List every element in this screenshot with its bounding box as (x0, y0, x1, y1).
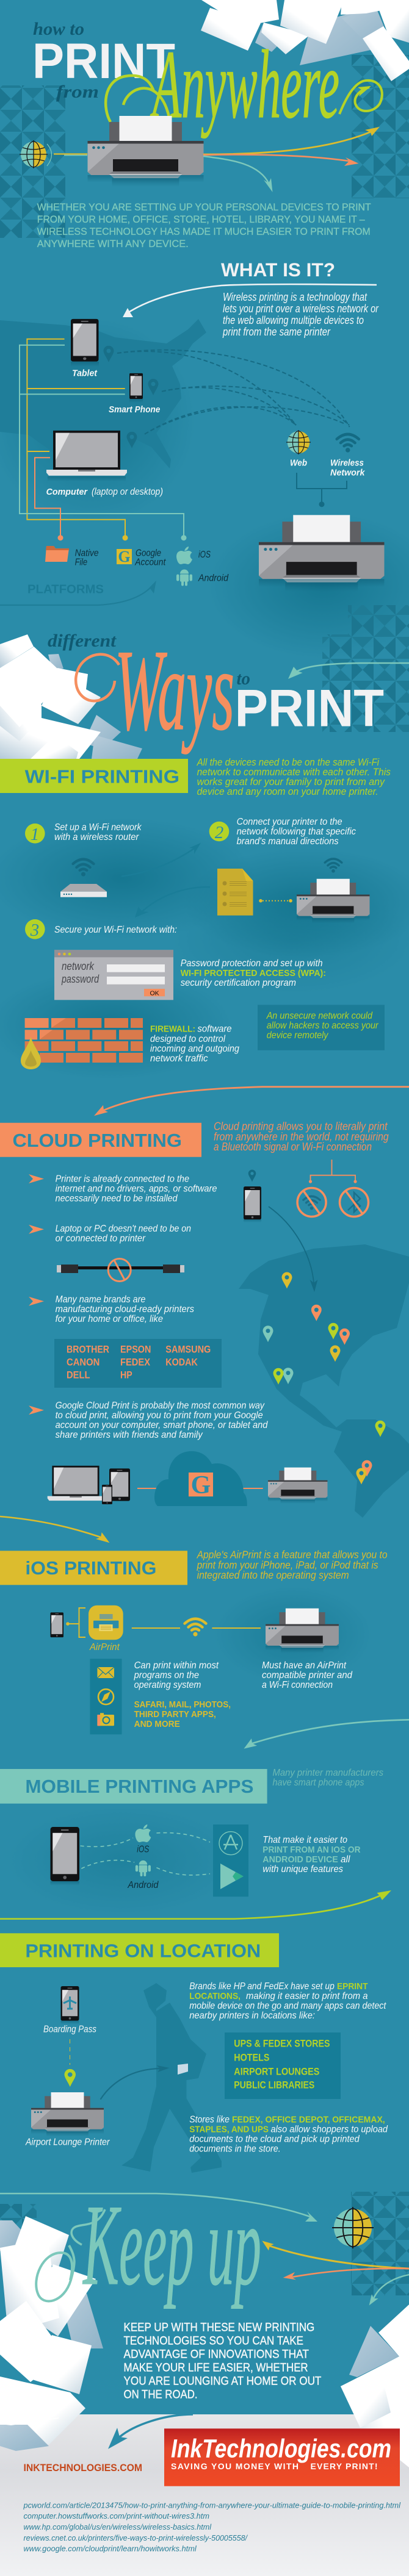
intro paragraph: ANYWHERE WITH ANY DEVICE. (37, 238, 189, 249)
arrow: orange (283, 2269, 409, 2280)
text: keep up paragraph: YOU ARE LOUNGING AT HOME OR OUT (123, 2375, 322, 2388)
text: compatibility: compatible printer and (262, 1670, 353, 1681)
icon: cloud with Google (154, 1451, 247, 1506)
paper pile: bottom right (341, 2305, 409, 2467)
description: have smart phone apps (272, 1778, 364, 1788)
intro paragraph: WHETHER YOU ARE SETTING UP YOUR PERSONAL DEVICES TO PRINT (37, 201, 371, 213)
band (0, 1769, 267, 1804)
heading: CLOUD PRINTING (12, 1130, 182, 1151)
text: apps: PRINT FROM AN IOS OR (262, 1845, 361, 1855)
heading: PRINT: PRINT (235, 680, 384, 738)
text: firewall: FIREWALL: (150, 1024, 195, 1035)
connectors: platforms (20, 339, 187, 540)
arrow: teal (288, 663, 409, 679)
platform: android: Android (127, 1880, 159, 1890)
panel: printer brands: EPSON (120, 1344, 151, 1355)
icon: app store (219, 1832, 242, 1855)
icon: wireless (337, 434, 359, 453)
icon: firewall (21, 1018, 143, 1069)
label: airport lounge printer: Airport Lounge Printer (25, 2137, 110, 2148)
arrow: step 1 to 2 (121, 843, 201, 877)
footer background (0, 2414, 409, 2576)
icon: printer (259, 515, 385, 592)
arrow: lime (0, 1890, 391, 1919)
text: firewall (150, 1024, 239, 1064)
icon: mail (97, 1667, 114, 1678)
text: definition: print from the same printer (222, 326, 331, 338)
description: works great for your family to print from any (197, 777, 386, 788)
arrow: white (123, 284, 377, 317)
description (197, 1548, 388, 1581)
login dialog: password (61, 973, 100, 985)
text: definition: Wireless printing is a technology that (223, 291, 367, 303)
sources: reviews.cnet.co.uk/printers/five-ways-to-print-wirelessly-50005558/ (23, 2533, 248, 2542)
platform: iOS: iOS (198, 550, 211, 560)
step 2: Connect your printer to the (237, 817, 342, 827)
icon: globe (20, 140, 87, 168)
connector (309, 1160, 357, 1183)
panel: printer brands: HP (120, 1369, 132, 1381)
panel: app stores (213, 1824, 248, 1896)
step 1 (25, 822, 142, 844)
text: eprint: Brands like HP and FedEx have set up (189, 1981, 335, 1992)
text: Ways (115, 626, 234, 755)
callout: unsecure network (258, 1005, 385, 1050)
dashed links (81, 1833, 210, 1875)
text: keep up paragraph (123, 2321, 322, 2401)
heading: MOBILE PRINTING APPS (25, 1776, 253, 1797)
bullet 3: Many name brands are (56, 1294, 145, 1305)
bullet 1: necessarily need to be installed (56, 1194, 178, 1204)
callout: unsecure network: An unsecure network could (266, 1011, 373, 1021)
label: platforms: PLATFORMS (27, 583, 104, 597)
arrow: to paper (100, 2065, 170, 2100)
heading: WI-FI PRINTING (25, 766, 179, 787)
text: eprint: LOCATIONS, (189, 1991, 241, 2001)
icon: cloud with Google: G (191, 1471, 211, 1499)
link lines (137, 1488, 263, 1489)
icon: printer (266, 1609, 339, 1653)
bullet 3: manufacturing cloud-ready printers (56, 1304, 194, 1315)
icon: tablet (71, 319, 99, 367)
sources: computer.howstuffworks.com/print-without-wires3.htm (23, 2511, 209, 2520)
panel: mobile printing apps (0, 1768, 383, 1804)
dotted link (259, 899, 292, 902)
text: keep up paragraph: ON THE ROAD. (123, 2388, 198, 2401)
heading: to: to (237, 669, 250, 689)
label: smart phone: Smart Phone (109, 404, 160, 415)
bullet 4 (29, 1401, 268, 1440)
panel: printer brands (54, 1339, 222, 1388)
text: definition: the web allowing multiple devices to (223, 314, 364, 326)
platform: google account: Google (136, 548, 161, 559)
description (214, 1120, 389, 1153)
icon: no wifi (297, 1188, 326, 1216)
step 2: brand's manual directions (237, 836, 339, 847)
description: from anywhere in the world, not requiring (214, 1130, 389, 1143)
label: wireless network: Wireless (330, 457, 364, 468)
text: WPA: security certification program (181, 978, 296, 988)
platform: iOS (135, 1824, 151, 1855)
platform: android (127, 1860, 159, 1890)
arrow: platforms (0, 581, 156, 605)
link lines (132, 1627, 261, 1629)
sources: www.hp.com/global/us/en/wireless/wireless-basics.html (23, 2522, 212, 2531)
text: keep up paragraph: ADVANTAGE OF INNOVATIONS THAT (123, 2348, 309, 2361)
icon: devices (48, 1466, 130, 1504)
bullet 3 (29, 1294, 194, 1324)
text: apps: with unique features (262, 1864, 343, 1875)
text: apps: That make it easier to (262, 1835, 347, 1845)
description: Apple's AirPrint is a feature that allows you to (197, 1548, 388, 1560)
platform: native file: File (75, 557, 87, 567)
label: computer (46, 487, 163, 497)
icon: laptop (46, 431, 127, 481)
text: eprint (189, 1981, 386, 2021)
panel: printing on location (0, 1933, 279, 1967)
arrow: teal (203, 156, 272, 192)
paper pile: top right (201, 0, 409, 81)
label: computer: Computer (46, 487, 88, 497)
description: print from your iPhone, iPad, or iPod that is (197, 1559, 378, 1571)
sources: pcworld.com/article/2013475/how-to-print-anything-from-anywhere-your-ultimate-guide-to-mobile-printing.html (23, 2500, 401, 2510)
icon: printer hero (88, 116, 204, 187)
platform: android (176, 570, 229, 586)
dashed connection curves (117, 350, 350, 434)
step 2: 2 (215, 823, 223, 842)
step 1: with a wireless router (54, 832, 139, 842)
icon: wifi over router (73, 859, 93, 877)
band (0, 1551, 187, 1585)
icon: globe (332, 2207, 374, 2248)
text: apps: ANDROID DEVICE (262, 1854, 338, 1865)
icon: AirPrint tile (89, 1606, 123, 1640)
text: compatibility (262, 1660, 353, 1690)
text: programs: operating system (134, 1680, 201, 1690)
icon: wifi (184, 1619, 206, 1637)
description (272, 1768, 383, 1788)
text: eprint: mobile device on the go and many apps can detect (189, 2001, 386, 2011)
panel: printer brands: BROTHER (67, 1344, 109, 1355)
heading: PRINTING ON LOCATION (25, 1940, 261, 1961)
arrow: teal (369, 2275, 409, 2305)
text: stores: STAPLES, AND UPS (189, 2124, 269, 2134)
description: integrated into the operating system (197, 1569, 349, 1581)
bullet 4: share printers with friends and family (56, 1430, 203, 1440)
text: firewall: network traffic (150, 1053, 208, 1064)
bullet 1: Printer is already connected to the (56, 1174, 189, 1185)
text: apps: all (341, 1854, 350, 1865)
description: All the devices need to be on the same Wi-Fi (197, 757, 380, 768)
sources (23, 2500, 401, 2553)
icon: phone with boarding pass (61, 1986, 79, 2025)
label: AirPrint: AirPrint (89, 1642, 120, 1652)
login dialog: network (62, 960, 95, 972)
silhouette: walking traveller (121, 1983, 222, 2173)
text: firewall: incoming and outgoing (150, 1044, 239, 1054)
login dialog (54, 950, 173, 1000)
panel: locations: PUBLIC LIBRARIES (234, 2079, 314, 2090)
bullet 4: account on your computer, smart phone, or tablet and (56, 1420, 268, 1430)
location pins (104, 346, 159, 448)
panel: printer brands: CANON (67, 1357, 100, 1368)
icon: pin (65, 2069, 76, 2087)
heading: what is it: WHAT IS IT? (221, 259, 335, 281)
bullet 1 (29, 1174, 217, 1204)
step 3 (25, 919, 177, 940)
description: Many printer manufacturers (272, 1768, 383, 1778)
heading: from: from (56, 82, 99, 102)
platform: iOS: iOS (137, 1845, 150, 1855)
panel: locations (225, 2032, 341, 2099)
bullet 4: to cloud print, allowing you to print from your Google (56, 1410, 263, 1421)
panel: locations: HOTELS (234, 2051, 269, 2063)
bullet 1: internet and no drivers, apps, or software (56, 1184, 217, 1194)
label: web: Web (290, 457, 307, 468)
callout: unsecure network: allow hackers to access your (267, 1021, 378, 1031)
step 3: Secure your Wi-Fi network with: (54, 925, 177, 935)
text: stores: Stores like (189, 2114, 230, 2125)
icon: small wifi (325, 859, 342, 873)
text: eprint: EPRINT (337, 1981, 367, 1992)
link: website: INKTECHNOLOGIES.COM (23, 2463, 142, 2474)
heading: Keep up script (36, 2181, 261, 2309)
intro paragraph (37, 201, 371, 249)
panel: locations: AIRPORT LOUNGES (234, 2066, 319, 2078)
text: WPA: Password protection and set up with (181, 958, 323, 969)
text: compatibility: a Wi-Fi connection (262, 1680, 333, 1690)
logo (164, 2428, 400, 2486)
heading: different: different (48, 631, 117, 651)
sources: www.google.com/cloudprint/learn/howitworks.html (23, 2544, 197, 2553)
text: WPA: WI-FI PROTECTED ACCESS (WPA): (181, 968, 326, 978)
panel: printer brands: KODAK (165, 1357, 198, 1368)
arrow: yellow (203, 127, 380, 154)
label: computer: (laptop or desktop) (92, 487, 163, 497)
icon: printer (31, 2092, 104, 2137)
description (197, 757, 391, 797)
text: eprint: nearby printers in locations like: (189, 2011, 315, 2021)
heading: PRINT: PRINT (32, 34, 175, 89)
icon: no bluetooth (339, 1188, 369, 1216)
icon: pin (248, 1170, 256, 1182)
label: tablet: Tablet (72, 368, 98, 379)
icon: phone (244, 1186, 261, 1222)
band (0, 1123, 201, 1157)
icon: printer (297, 879, 370, 924)
bullet 2: Laptop or PC doesn't need to be on (56, 1224, 191, 1234)
text: firewall: software (198, 1024, 232, 1035)
arc arrow (269, 1207, 317, 1292)
icon: phone (50, 1612, 63, 1637)
arrow: teal (244, 1720, 409, 1749)
icon: printer (268, 1468, 327, 1504)
text: apps (262, 1835, 361, 1875)
heading: how to: how to (33, 19, 84, 39)
label: boarding pass: Boarding Pass (43, 2025, 96, 2035)
panel: wi-fi printing (0, 757, 391, 797)
description: device and any room on your home printer. (197, 786, 378, 797)
logo: SAVING YOU MONEY WITH (171, 2461, 299, 2471)
arrow: step 2 to 3 (135, 887, 210, 917)
text: stores: also allow shoppers to upload (271, 2124, 388, 2134)
icon: compass (98, 1689, 114, 1704)
description: a Bluetooth signal or Wi-Fi connection (214, 1141, 372, 1153)
description: network to communicate with each other. This (197, 767, 391, 778)
step 3: 3 (30, 920, 39, 940)
map: United States silhouette (0, 319, 206, 468)
arrow: orange (94, 1087, 409, 1116)
text: programs: THIRD PARTY APPS, (134, 1709, 216, 1720)
platform: google account: Account (134, 557, 166, 567)
panel: app icons (90, 1659, 122, 1734)
dashed link (70, 2039, 71, 2065)
bullet 3: for your home or office, like (56, 1314, 163, 1324)
text: keep up paragraph: TECHNOLOGIES SO YOU CAN TAKE (123, 2335, 303, 2348)
platform: google account: G (118, 548, 131, 565)
platform: iOS (176, 547, 211, 564)
bullet 4: Google Cloud Print is probably the most common way (56, 1401, 265, 1411)
text: stores: documents in the store. (189, 2144, 281, 2154)
text: programs: Can print within most (134, 1660, 219, 1671)
band (0, 1933, 279, 1967)
callout: unsecure network: device remotely (267, 1030, 328, 1041)
text: stores: FEDEX, OFFICE DEPOT, OFFICEMAX, (232, 2114, 385, 2125)
paper pile: bottom left (0, 2216, 103, 2451)
text: programs (134, 1660, 231, 1729)
intro paragraph: WIRELESS TECHNOLOGY HAS MADE IT MUCH EASIER TO PRINT FROM (37, 226, 371, 237)
login dialog: OK (150, 989, 159, 997)
text: programs: AND MORE (134, 1719, 180, 1729)
icon: printed paper (178, 2064, 188, 2075)
panel: printer brands: SAMSUNG (165, 1344, 211, 1355)
text: keep up paragraph: KEEP UP WITH THESE NEW PRINTING (123, 2321, 314, 2334)
text: programs: SAFARI, MAIL, PHOTOS, (134, 1699, 231, 1710)
heading: Ways script (76, 626, 234, 755)
step 1: 1 (31, 825, 39, 844)
icon: cable (57, 1259, 184, 1281)
text: stores (189, 2114, 388, 2154)
step 2: network following that specific (237, 827, 356, 837)
panel: printer brands: FEDEX (120, 1357, 151, 1368)
icon: camera (97, 1713, 114, 1726)
band (0, 759, 188, 793)
text: compatibility: Must have an AirPrint (262, 1660, 347, 1671)
text: definition (222, 291, 379, 338)
panel: locations: UPS & FEDEX STORES (234, 2037, 330, 2049)
step 2 (209, 817, 356, 847)
text: WPA (181, 958, 326, 988)
panel: printer brands: DELL (67, 1369, 90, 1381)
label: wireless network (330, 457, 365, 478)
bracket (66, 1608, 85, 1637)
text: stores: documents to the cloud and pick up printed (189, 2134, 360, 2144)
logo: EVERY PRINT! (310, 2461, 377, 2471)
platform: android: Android (198, 573, 229, 584)
bullet 2: or connected to printer (56, 1233, 146, 1244)
platform: google account (117, 548, 166, 567)
icon: web globe (286, 430, 311, 454)
arrow: teal (0, 2194, 317, 2222)
arrow: yellow (0, 1516, 110, 1543)
platform: native file (45, 546, 99, 567)
map: Americas silhouette (239, 1244, 409, 1518)
arrow: orange (203, 154, 359, 166)
heading: iOS PRINTING (25, 1557, 156, 1579)
icon: router (60, 884, 107, 897)
step 1: Set up a Wi-Fi network (54, 822, 142, 833)
text: programs: programs on the (134, 1670, 199, 1681)
panel: iOS printing (0, 1548, 388, 1585)
arrow: footer (108, 2414, 193, 2449)
description: Cloud printing allows you to literally print (214, 1120, 388, 1132)
intro paragraph: FROM YOUR HOME, OFFICE, STORE, HOTEL, LIBRARY, YOU NAME IT – (37, 213, 365, 225)
icon: smart phone (129, 373, 143, 403)
icon: play store (220, 1864, 244, 1889)
paper pile: left (0, 634, 142, 759)
text: keep up paragraph: MAKE YOUR LIFE EASIER, WHETHER (123, 2362, 308, 2375)
panel: cloud printing (0, 1120, 389, 1157)
icon: manual document (217, 869, 253, 916)
text: eprint: making it easier to print from a (246, 1991, 368, 2001)
icon: phone (50, 1827, 79, 1885)
bracket (297, 473, 347, 507)
map pins (262, 1272, 386, 1485)
label: wireless network: Network (330, 467, 365, 478)
text: firewall: designed to control (150, 1034, 225, 1044)
platform: native file: Native (75, 548, 99, 559)
bullet 2 (29, 1224, 191, 1244)
arrow: yellow (262, 2241, 409, 2269)
